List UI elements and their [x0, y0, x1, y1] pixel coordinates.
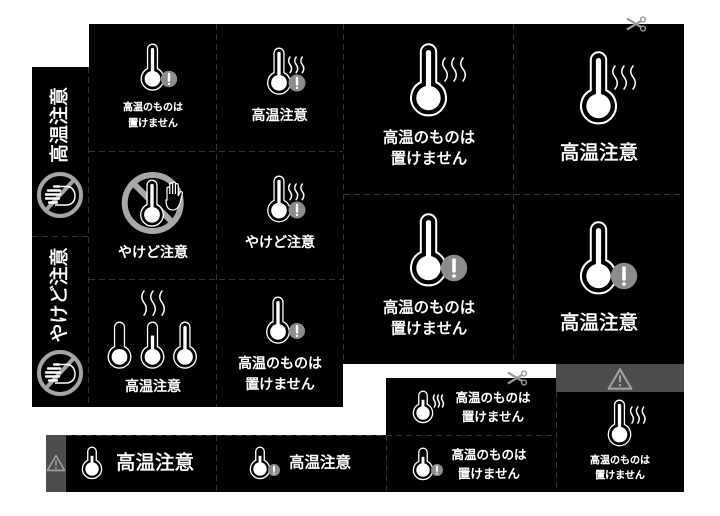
icon: no touching hand: [39, 174, 81, 216]
panel: thermometer steam warning, burn caution: [245, 176, 315, 250]
icon: scissors lower: [508, 371, 526, 385]
icon: thermometer: [250, 447, 270, 479]
icon: steam: [289, 57, 304, 73]
label: 高温注意: [560, 312, 638, 334]
label: [455, 390, 531, 424]
panel: large thermometer warning, heat caution: [560, 222, 638, 334]
panel: large thermometer steam, do not place: [383, 44, 475, 167]
label: [238, 355, 322, 392]
label: 高温注意: [560, 142, 638, 164]
label: [383, 298, 475, 338]
icon: thermometer: [141, 180, 163, 226]
icon: hand: [166, 182, 182, 210]
icon: steam: [142, 291, 164, 315]
panel: three thermometers: [108, 291, 196, 394]
icon: warning badge: [431, 464, 443, 476]
panel: horizontal warning label: [413, 447, 527, 481]
label: [383, 128, 475, 168]
vertical label: 高温注意: 高温注意: [48, 87, 70, 163]
label: 高温注意: [125, 378, 181, 394]
icon: steam: [613, 66, 635, 89]
icon: warning badge: [288, 74, 306, 92]
icon: thermometer middle: [141, 322, 164, 368]
label: [123, 100, 183, 130]
label: やけど注意: [118, 244, 188, 260]
panel: large thermometer steam, heat caution: [560, 52, 638, 164]
icon: warning triangle: [609, 369, 631, 389]
panel: strip heat caution with warning tab: [46, 435, 194, 492]
icon: scissors top right: [627, 17, 645, 31]
header band: [556, 364, 684, 392]
label: やけど注意: [245, 234, 315, 250]
label: 置けません: [391, 320, 467, 338]
icon: thermometer: [411, 44, 446, 115]
label: 置けません: [595, 470, 645, 482]
icon: warning badge: [289, 323, 305, 339]
label: [451, 447, 527, 481]
icon: warning badge: [441, 255, 467, 281]
icon: steam: [289, 184, 304, 200]
label: 高温のものは: [238, 355, 322, 371]
panel: prohibited burn caution: [118, 175, 188, 260]
label: 高温のものは: [383, 128, 475, 146]
icon: thermometer: [608, 400, 631, 446]
icon: thermometer: [268, 176, 290, 222]
label: 高温のものは: [451, 447, 527, 462]
icon: thermometer: [413, 448, 433, 480]
label: 置けません: [128, 118, 178, 130]
icon: thermometer: [268, 48, 290, 94]
panel: strip heat caution with warning badge: [250, 447, 351, 479]
grey tab: [46, 435, 66, 492]
icon: warning badge: [288, 202, 306, 218]
label: 置けません: [462, 410, 524, 424]
label: 高温のものは: [455, 390, 531, 405]
icon: thermometer low: [108, 322, 131, 368]
label: 高温注意: [252, 107, 308, 123]
label: 高温注意: [289, 454, 351, 472]
icon: thermometer high: [174, 322, 196, 368]
icon: warning triangle: [47, 456, 65, 470]
icon: steam: [433, 395, 443, 407]
panel: large thermometer warning, do not place: [383, 214, 475, 338]
vertical label: やけど注意: やけど注意: [48, 247, 70, 343]
icon: thermometer: [141, 44, 164, 90]
icon: steam: [630, 407, 645, 423]
icon: thermometer: [581, 52, 616, 123]
panel: thermometer steam warning, heat caution: [252, 48, 308, 123]
label: 置けません: [391, 150, 467, 168]
label: 高温のものは: [123, 100, 183, 114]
label: 置けません: [245, 376, 315, 392]
panel: vertical tag with warning header: [556, 364, 684, 482]
label: 高温注意: [116, 452, 194, 474]
panel: vertical sticker heat caution: [39, 87, 81, 216]
icon: prohibition ring: [125, 175, 181, 231]
icon: thermometer: [82, 447, 102, 479]
icon: thermometer: [413, 391, 433, 423]
icon: thermometer: [411, 214, 446, 285]
icon: warning badge: [611, 263, 637, 289]
panel: vertical sticker burn caution: [39, 247, 81, 394]
icon: thermometer: [267, 297, 289, 343]
icon: thermometer: [581, 222, 616, 293]
label: 置けません: [458, 467, 520, 481]
label: 高温のものは: [590, 454, 650, 466]
icon: steam: [443, 58, 465, 81]
icon: no touching hand: [39, 352, 81, 394]
label: [590, 454, 650, 482]
panel: horizontal steam label: [413, 390, 531, 424]
label: 高温のものは: [383, 298, 475, 316]
icon: warning badge: [268, 464, 280, 476]
panel: thermometer warning, two line label: [238, 297, 322, 392]
panel: thermometer with warning, do not place hot items, small: [123, 44, 183, 130]
icon: warning badge: [161, 71, 177, 87]
